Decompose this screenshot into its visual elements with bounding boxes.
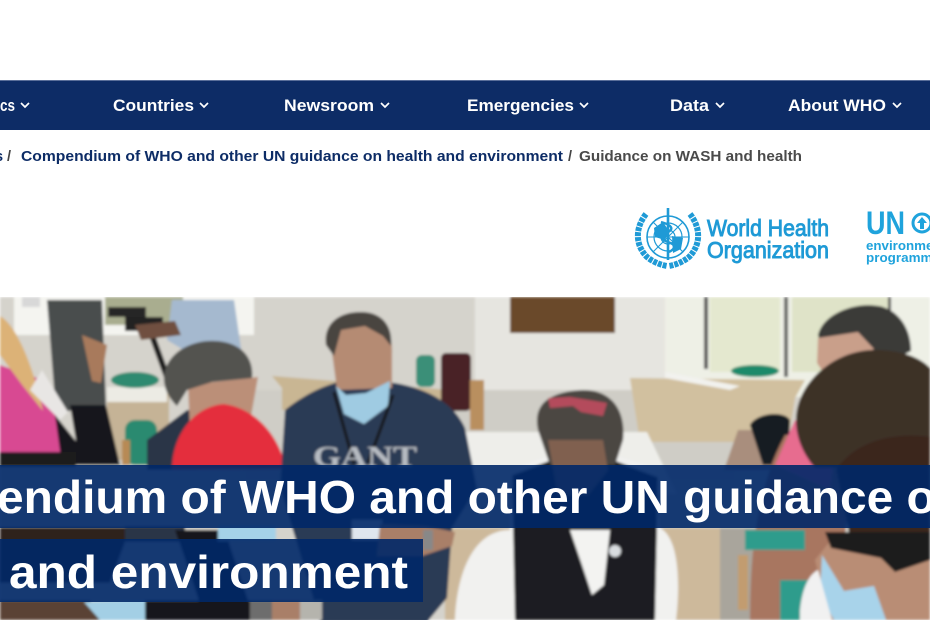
logo: World Health Organization: World Health	[707, 215, 829, 241]
standing man left	[22, 297, 120, 465]
man with GANT t-shirt: GANT	[313, 441, 417, 473]
navigation bar	[0, 80, 930, 130]
logo: UN environment programme	[866, 205, 930, 265]
breadcrumb: /	[568, 149, 572, 165]
woman right foreground	[800, 436, 930, 620]
navigation bar: cs	[0, 97, 15, 115]
man with GANT t-shirt	[280, 312, 477, 620]
navigation bar: Emergencies	[467, 97, 574, 115]
bag	[724, 414, 790, 470]
blue mask front figure	[145, 525, 322, 620]
curly hair	[796, 350, 930, 468]
breadcrumb: Guidance on WASH and health	[579, 149, 802, 165]
navigation bar: About WHO	[788, 97, 886, 115]
cameraman	[108, 300, 242, 385]
heading banner line 1: endium of WHO and other UN guidance on	[0, 471, 930, 523]
navigation bar: Data	[670, 97, 710, 115]
central man with black vest	[455, 390, 678, 620]
hands and badge between banners	[125, 520, 455, 556]
navigation bar: Newsroom	[284, 97, 374, 115]
breadcrumb	[0, 149, 802, 165]
teal chair by arm	[738, 530, 810, 620]
chairs	[111, 355, 779, 465]
breadcrumb: Compendium of WHO and other UN guidance on health and environment	[21, 149, 563, 165]
blonde woman in pink	[0, 316, 82, 466]
bottom-left woman	[0, 527, 145, 620]
breadcrumb: /	[7, 149, 11, 165]
red hair	[172, 404, 286, 470]
painting	[510, 297, 615, 333]
heading banner line 2: and environment	[9, 546, 408, 598]
logo: World Health Organization	[638, 208, 829, 266]
man at right back	[750, 305, 911, 620]
logo: World Health Organization: Organization	[707, 237, 829, 263]
room walls and windows	[0, 297, 930, 620]
man with grey hair	[147, 341, 258, 470]
tables and paper	[107, 372, 805, 620]
navigation bar: Countries	[113, 97, 194, 115]
photo: workshop participants around a table	[0, 297, 930, 620]
logo: UN environment programme: UN	[866, 205, 905, 241]
backpack on chair	[441, 353, 484, 430]
